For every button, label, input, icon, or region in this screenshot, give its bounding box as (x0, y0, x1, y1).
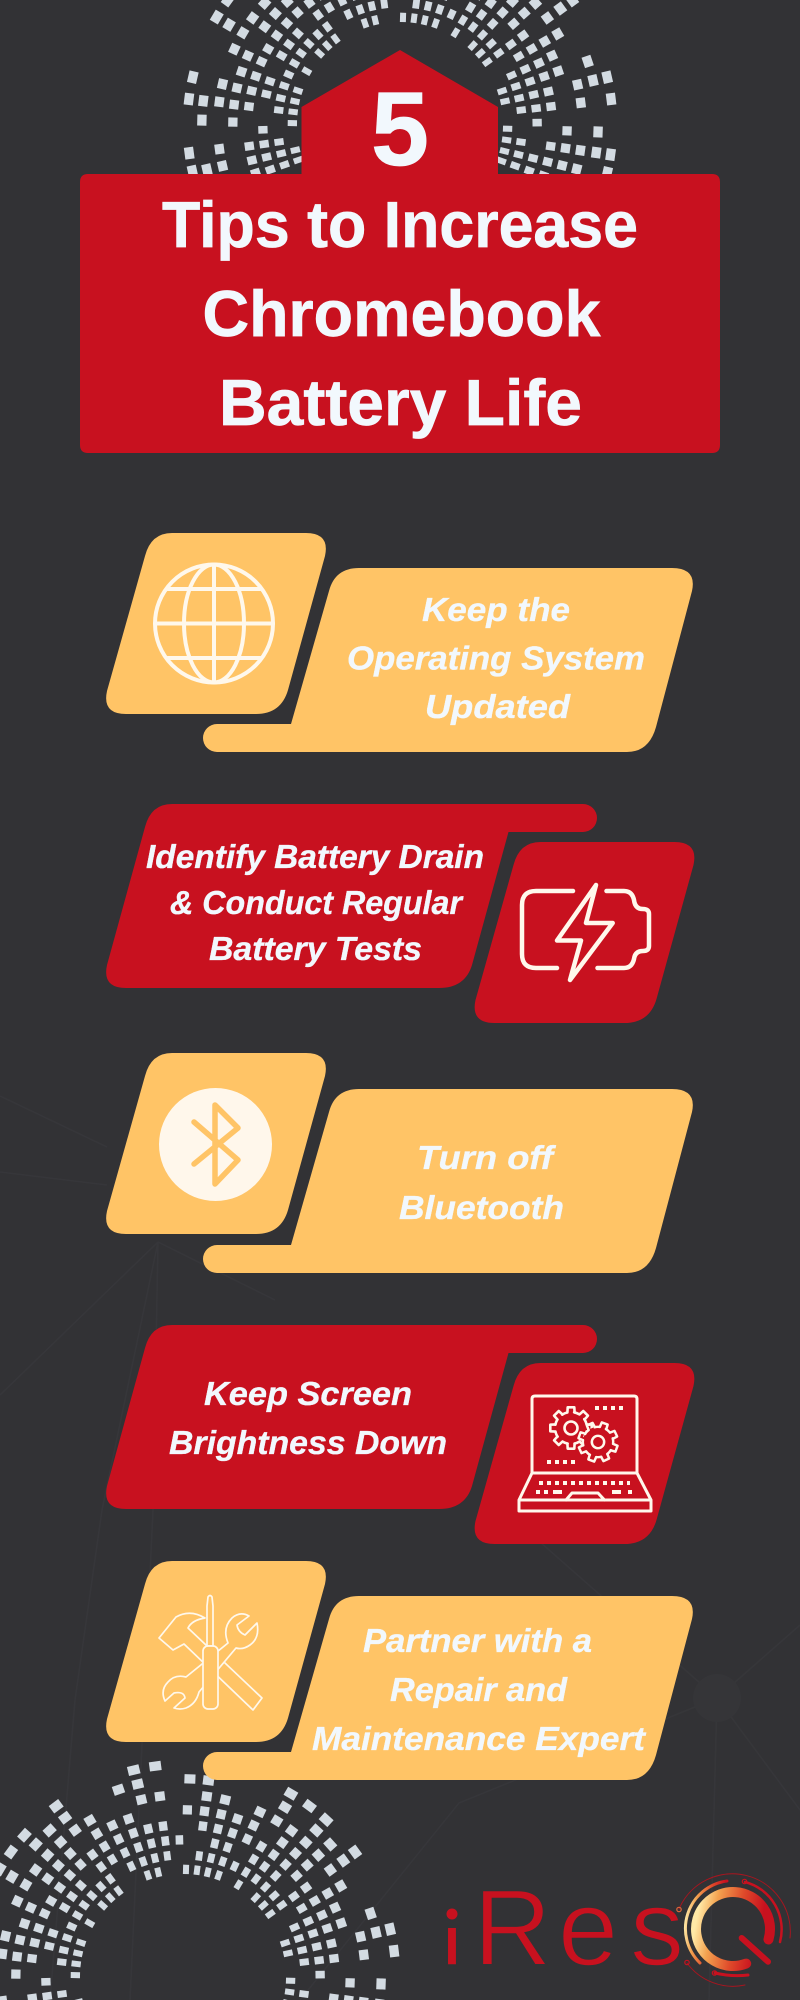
tip 3 (106, 1053, 693, 1273)
title banner (80, 50, 720, 453)
icon: laptop with gears (519, 1396, 651, 1511)
title line 2: Chromebook (202, 277, 601, 350)
tip 2 (106, 804, 694, 1023)
tip text (169, 1375, 447, 1461)
banner shape (80, 50, 720, 453)
text panel (203, 568, 693, 752)
icon panel: bluetooth (106, 1053, 326, 1234)
text panel (203, 1089, 693, 1273)
tip text: Keep the (422, 591, 570, 628)
icon: globe (155, 564, 273, 682)
title line 1: Tips to Increase (162, 188, 638, 261)
logo i dot (443, 1884, 461, 1928)
logo Q mark (677, 1874, 790, 1986)
icon: bluetooth (159, 1088, 272, 1201)
dot pattern: top (184, 0, 616, 181)
logo: iResQ (440, 1867, 790, 1988)
text panel (106, 804, 597, 988)
dot pattern: bottom (0, 1761, 399, 2000)
icon: tools (159, 1596, 262, 1710)
tip text: Maintenance Expert (312, 1720, 647, 1757)
icon panel: globe (106, 533, 326, 714)
tip text: & Conduct Regular (170, 884, 464, 921)
tip 1 (106, 533, 693, 752)
tip text: Brightness Down (169, 1424, 447, 1461)
title line 3: Battery Life (219, 366, 582, 439)
tip text: Battery Tests (209, 930, 422, 967)
tip text: Turn off (417, 1139, 556, 1176)
icon panel: laptop (475, 1363, 694, 1544)
tip text (399, 1139, 564, 1226)
tip 4 (106, 1325, 694, 1544)
logo wordmark: iRes (440, 1867, 684, 1988)
icon: battery (522, 885, 649, 980)
number 5: 5 (371, 71, 429, 188)
icon panel: tools (106, 1561, 326, 1742)
tip text: Partner with a (363, 1622, 592, 1659)
tip text: Bluetooth (399, 1189, 564, 1226)
tip text: Operating System (347, 640, 645, 676)
faint network lines (0, 1096, 800, 2000)
tip text (146, 838, 484, 967)
tip 5 (106, 1561, 693, 1780)
text panel (106, 1325, 597, 1509)
text panel (203, 1596, 693, 1780)
tip text (312, 1622, 647, 1757)
tip text: Updated (425, 688, 571, 725)
icon panel: battery (475, 842, 694, 1023)
tip text (347, 591, 645, 725)
tip text: Keep Screen (204, 1375, 412, 1412)
tip text: Repair and (390, 1671, 568, 1708)
tip text: Identify Battery Drain (146, 838, 484, 875)
